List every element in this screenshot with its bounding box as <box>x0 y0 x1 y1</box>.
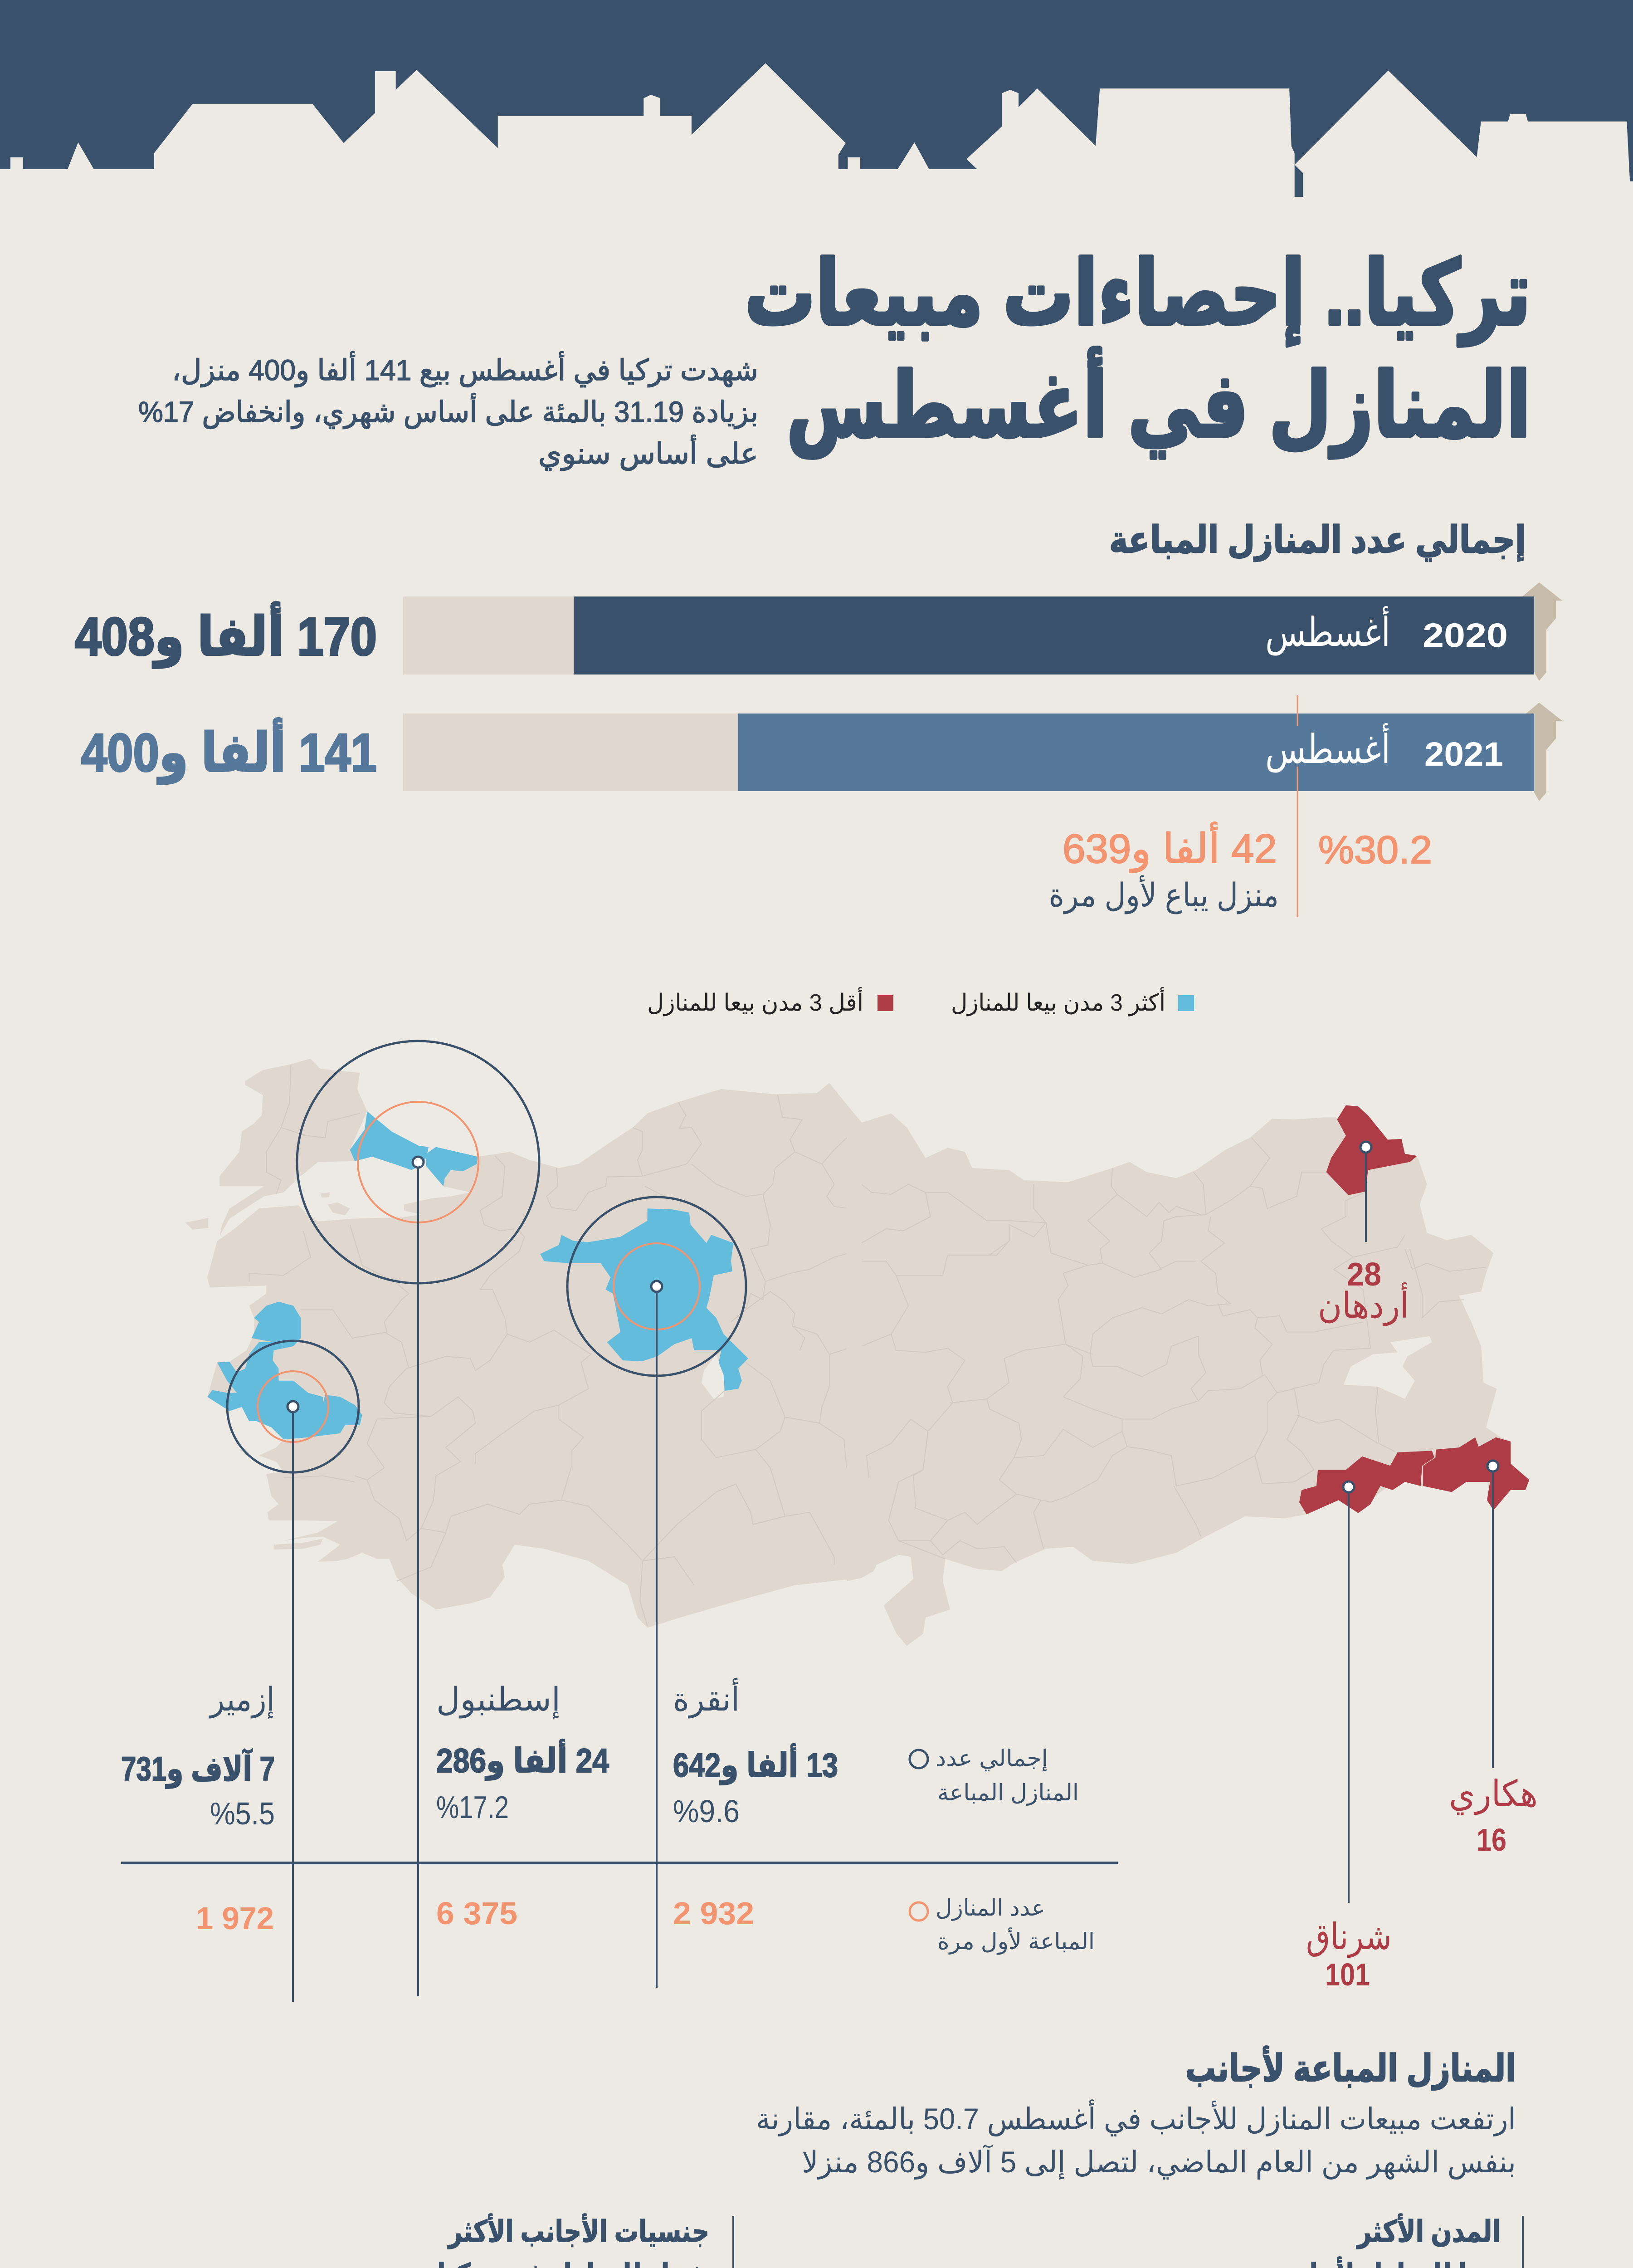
bar 2020: أغسطس <box>1265 606 1390 656</box>
panel: top nationalities <box>117 2213 802 2268</box>
label: Ardahan: أردهان <box>1318 1282 1409 1326</box>
label: Sirnak <box>1306 1916 1392 1992</box>
first-time sales callout: 42 ألفا و639 <box>1063 822 1277 873</box>
column: Izmir: إزمير <box>209 1681 275 1719</box>
table legend: first-time: عدد المنازل <box>936 1895 1045 1921</box>
column: Izmir: %5.5 <box>210 1796 275 1831</box>
column: Istanbul: %17.2 <box>436 1789 509 1825</box>
marker: Ardahan <box>1360 1142 1371 1242</box>
column: Izmir: 7 آلاف و731 <box>121 1748 275 1789</box>
header skyline <box>0 0 1633 197</box>
bar 2020: 170 ألفا و408 <box>75 601 377 668</box>
label: Hakkari <box>1449 1774 1538 1857</box>
bar 2021: 141 ألفا و400 <box>81 718 377 784</box>
table legend: first-time <box>910 1895 1095 1955</box>
label: Ardahan: 28 <box>1347 1256 1381 1293</box>
city stats table <box>121 1678 1118 1955</box>
label: Ardahan <box>1318 1256 1409 1326</box>
intro text: بزيادة 31.19 بالمئة على أساس شهري، وانخفاض 17% <box>138 393 758 429</box>
heading: homes sold to foreigners: المنازل المباعة لأجانب <box>1185 2046 1516 2090</box>
map west <box>185 1059 862 1628</box>
column: Ankara: 13 ألفا و642 <box>673 1743 838 1785</box>
column: Ankara: %9.6 <box>673 1794 740 1829</box>
table legend: total: إجمالي عدد <box>936 1745 1048 1772</box>
column: Izmir: 1 972 <box>196 1901 274 1936</box>
column: Ankara <box>673 1678 838 1931</box>
bar 2021: أغسطس <box>1265 723 1390 773</box>
province: Istanbul <box>350 1111 478 1186</box>
column: Izmir <box>121 1681 275 1936</box>
bar 2020: 2020 <box>1423 616 1508 654</box>
title <box>745 243 1531 458</box>
column: Ankara: أنقرة <box>673 1678 740 1719</box>
column: Istanbul <box>436 1681 609 1931</box>
marker: Ankara <box>567 1197 746 1988</box>
column: Istanbul: إسطنبول <box>436 1681 561 1719</box>
foreigners paragraph: بنفس الشهر من العام الماضي، لتصل إلى 5 آلاف و866 منزلا <box>802 2144 1516 2180</box>
label: Sirnak: شرناق <box>1306 1916 1392 1958</box>
table legend: total: المنازل المباعة <box>937 1780 1079 1806</box>
top provinces: blue <box>207 1111 748 1439</box>
column: Ankara: 2 932 <box>673 1896 754 1931</box>
table legend: first-time: المباعة لأول مرة <box>937 1927 1095 1955</box>
map legend <box>647 987 1194 1017</box>
icon: arrow marker 2020 <box>1517 582 1562 681</box>
icon: arrow marker 2021 <box>1517 703 1562 801</box>
bar 2020 <box>75 582 1562 681</box>
intro text <box>138 351 758 471</box>
cities heading: المدن الأكثر <box>1356 2213 1501 2249</box>
province: Ankara <box>540 1208 748 1391</box>
bar 2021 <box>81 703 1562 801</box>
marker: Hakkari <box>1487 1461 1498 1768</box>
map of Turkey <box>185 1059 1529 1646</box>
cities heading <box>1274 2213 1501 2268</box>
marker: Izmir <box>227 1341 359 2002</box>
bar 2021: 2021 <box>1424 735 1503 773</box>
province: Hakkari <box>1423 1437 1529 1510</box>
foreigners paragraph <box>756 2099 1516 2180</box>
province: Sirnak <box>1299 1451 1434 1514</box>
foreigners paragraph: ارتفعت مبيعات المنازل للأجانب في أغسطس 50.7 بالمئة، مقارنة <box>756 2099 1516 2136</box>
lowest provinces: red <box>1299 1105 1529 1514</box>
marker: Istanbul <box>297 1041 539 1996</box>
first-time sales callout <box>1049 695 1432 917</box>
label: Sirnak: 101 <box>1325 1957 1370 1992</box>
province: Izmir <box>207 1302 362 1439</box>
nationalities heading: جنسيات الأجانب الأكثر <box>448 2213 709 2249</box>
nationalities heading <box>437 2213 709 2268</box>
column: Istanbul: 6 375 <box>436 1896 517 1931</box>
marker: Sirnak <box>1343 1481 1354 1903</box>
column: Istanbul: 24 ألفا و286 <box>436 1739 609 1781</box>
first-time sales callout: %30.2 <box>1318 828 1432 872</box>
label: Hakkari: هكاري <box>1449 1774 1538 1815</box>
lake Tuz <box>702 1354 725 1399</box>
heading: total homes sold: إجمالي عدد المنازل المباعة <box>1109 519 1526 562</box>
panel: top cities <box>888 2213 1556 2268</box>
intro text: على أساس سنوي <box>538 435 758 471</box>
lake Van <box>1344 1336 1432 1399</box>
first-time sales callout: منزل يباع لأول مرة <box>1049 875 1279 914</box>
label: Hakkari: 16 <box>1477 1822 1506 1857</box>
map east <box>847 1113 1529 1646</box>
intro text: شهدت تركيا في أغسطس بيع 141 ألفا و400 منزل، <box>172 351 758 387</box>
province: Ardahan <box>1326 1105 1417 1195</box>
map legend: أقل 3 مدن بيعا للمنازل <box>647 987 863 1017</box>
table legend: total <box>910 1745 1079 1806</box>
map legend: أكثر 3 مدن بيعا للمنازل <box>951 987 1165 1017</box>
